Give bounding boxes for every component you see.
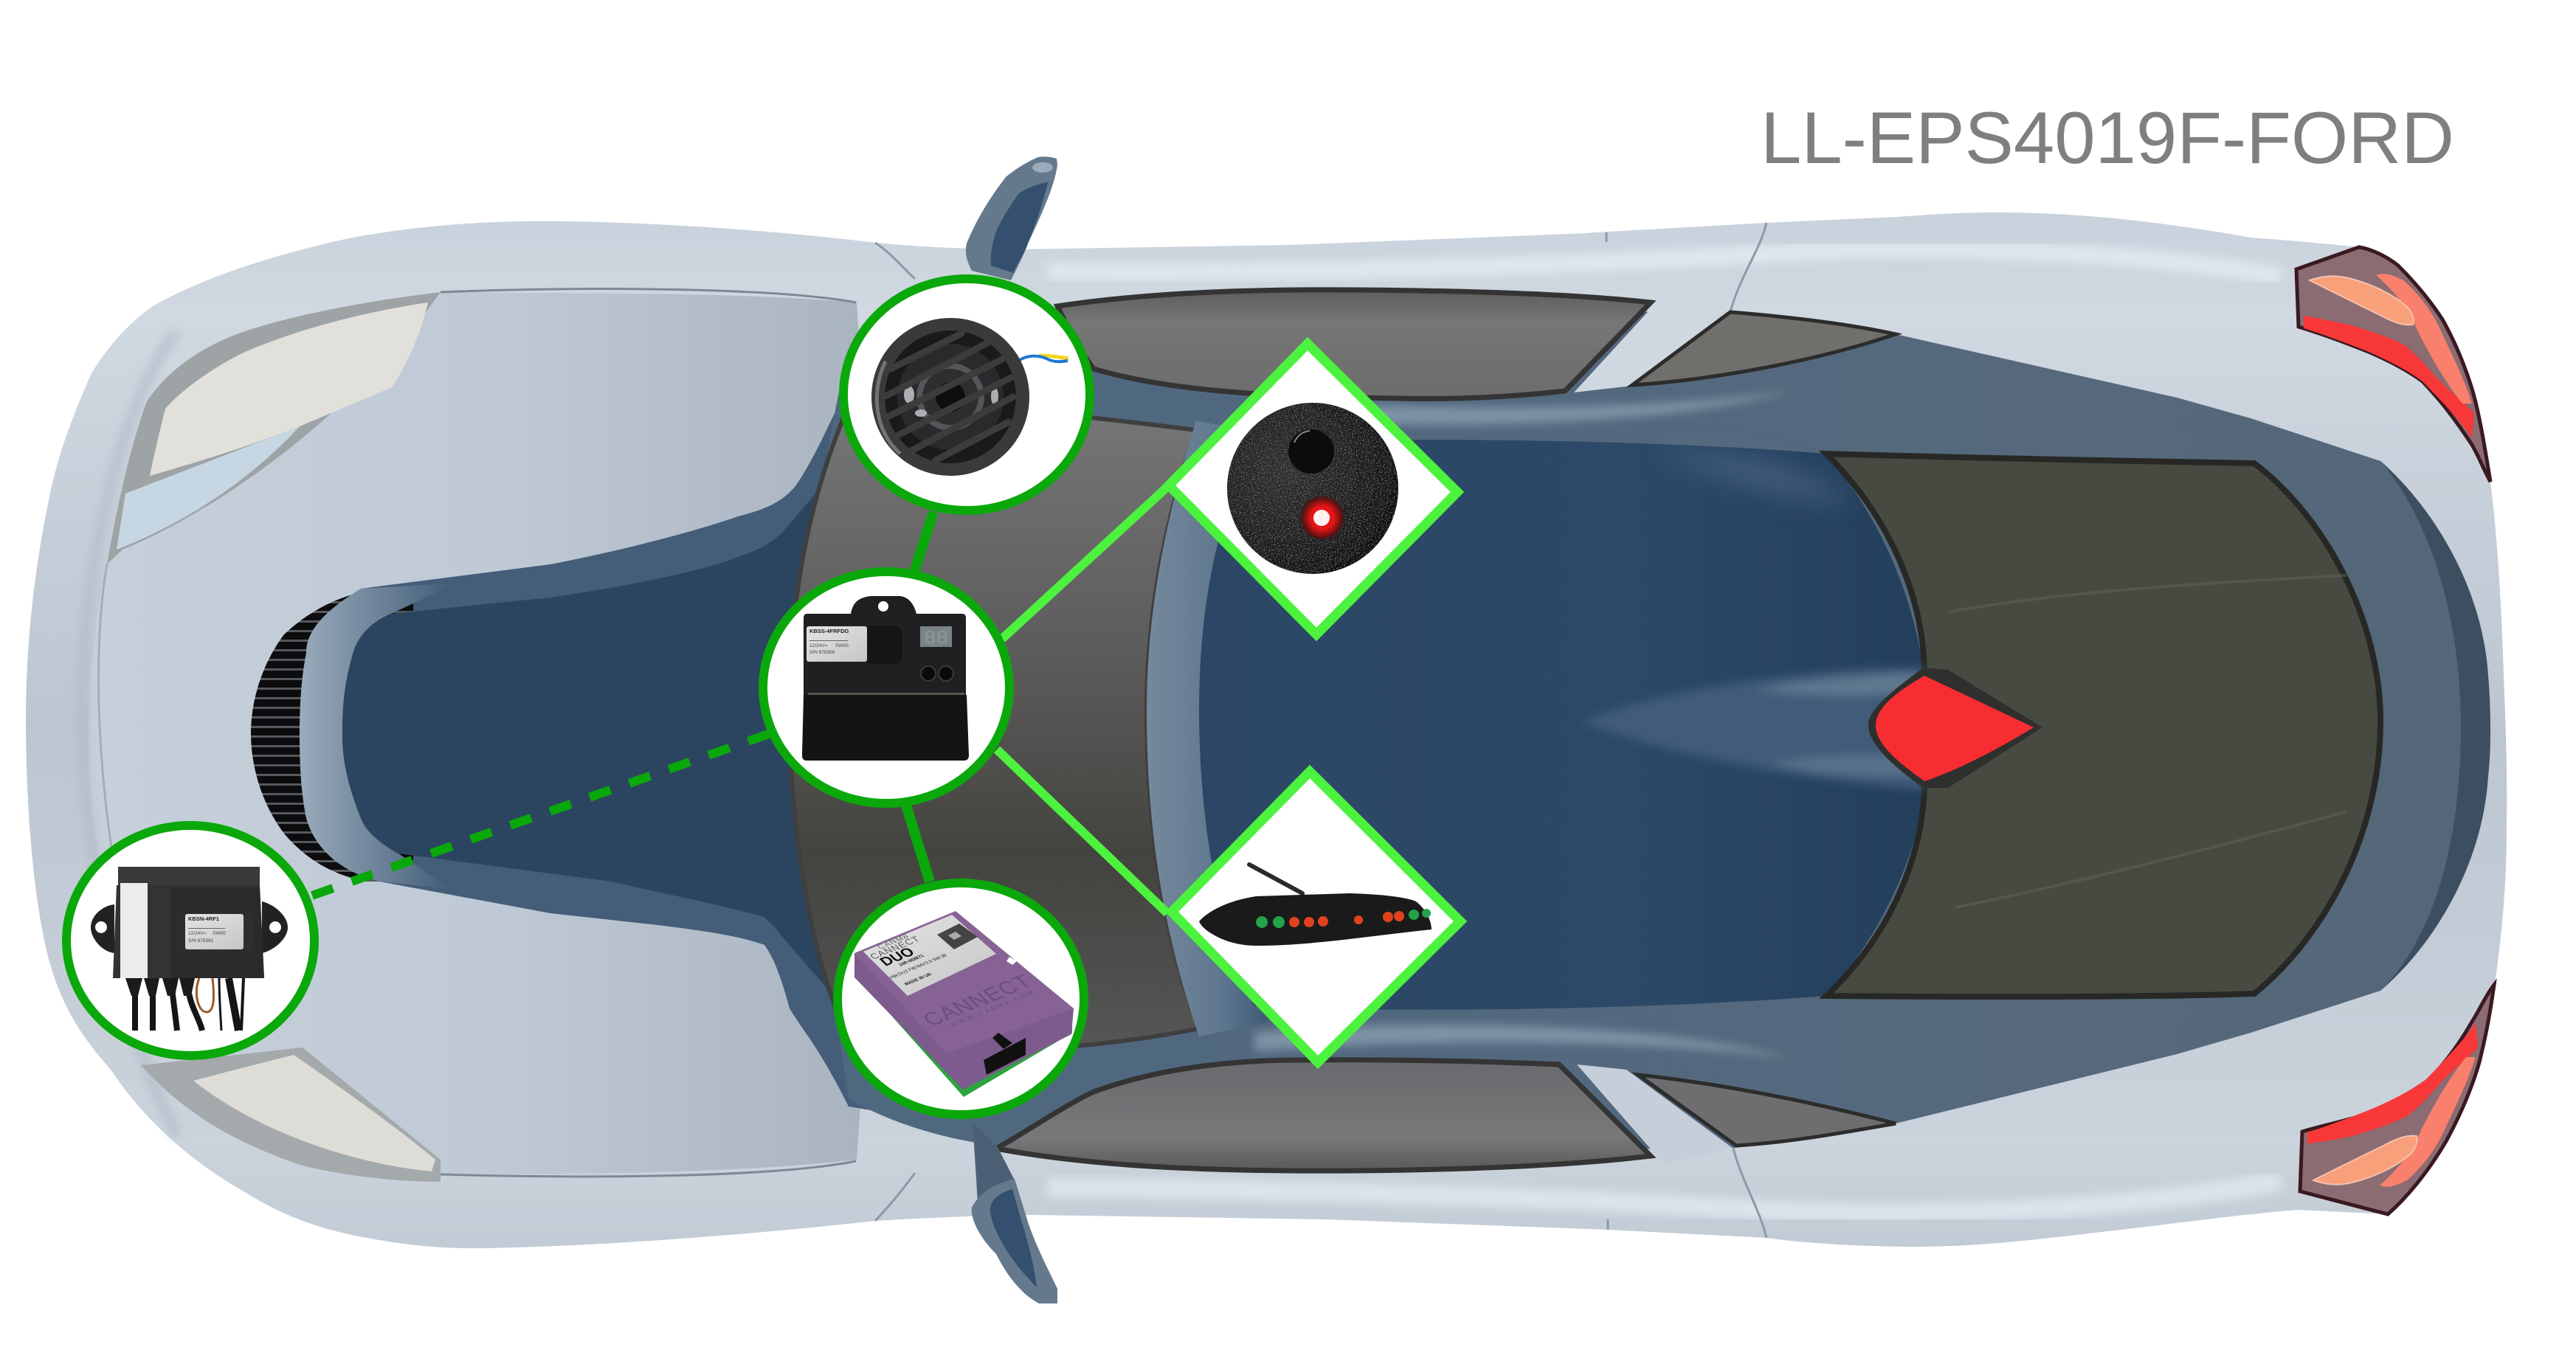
module embossed logo: WWW.CANM8.COM (949, 988, 1037, 1028)
hood panel (89, 292, 885, 1174)
module label text: DUO (877, 945, 918, 969)
panel: canbus module (838, 883, 1084, 1115)
panel: speaker (843, 279, 1090, 510)
module label text: MADE IN UK (903, 972, 933, 986)
icon: speaker wire (1020, 356, 1068, 361)
panel: controller (763, 572, 1009, 803)
connector: controller to display (997, 749, 1167, 913)
controller label (807, 626, 867, 662)
outer rim highlights (1048, 249, 2280, 277)
panel: relay module (66, 825, 314, 1056)
lower tail light (2300, 985, 2494, 1214)
upper rail highlight (1254, 391, 1793, 425)
model number title: LL-EPS4019F-FORD (1761, 97, 2454, 179)
hood blue scoop and cowl (361, 310, 981, 1129)
lower pillar (1577, 1064, 1733, 1163)
upper rear quarter window (1632, 312, 1896, 385)
relay label: SW00 (213, 931, 226, 936)
connector: speaker to controller (914, 512, 933, 572)
panel: button diamond (1169, 344, 1457, 634)
roof highlights (1653, 450, 1852, 502)
relay label (185, 914, 244, 949)
module label text: HW:DU2 FW:NAV3.9 SW:38 (888, 953, 948, 980)
rear window (1826, 454, 2380, 997)
lower rear quarter window (1638, 1075, 1896, 1146)
controller label: KBSS-4FRFDG (809, 628, 849, 634)
relay label: KBSN-4RF1 (188, 915, 219, 922)
a-pillar band (1147, 420, 1269, 1036)
upper mirror (966, 156, 1057, 280)
icon: parking display (1199, 865, 1432, 946)
icon: relay cables (135, 978, 244, 1031)
icon: speaker grille (871, 318, 1029, 476)
icon: relay box (91, 867, 288, 978)
lower rail highlight (1254, 1025, 1793, 1059)
controller label: SW00 (835, 643, 849, 648)
lower side window (996, 1060, 1651, 1171)
icon: canbus module body (854, 911, 1074, 1097)
module embossed logo: CANNECT (918, 971, 1038, 1031)
greenhouse slate (813, 310, 2486, 1151)
hood dark blue centre (342, 472, 834, 996)
lower headlight (141, 1048, 441, 1182)
connector: controller to duo (906, 806, 930, 882)
car body (26, 212, 2507, 1248)
windshield (790, 394, 1199, 1052)
connector: dashed link (312, 732, 775, 896)
door seams (99, 223, 1767, 1238)
connector: controller to button (1002, 487, 1167, 639)
icon: push button sensor (1227, 403, 1398, 574)
module label text: CANNECT (868, 934, 922, 961)
upper side window (1057, 290, 1651, 399)
lower mirror (972, 1121, 1057, 1303)
icon: relay connectors (125, 978, 195, 996)
module label text (868, 932, 948, 986)
relay label: S/N 878361 (188, 938, 214, 943)
icon: controller box: 88 (924, 628, 948, 648)
QR code (937, 924, 978, 949)
module label text: CANM8 (876, 932, 911, 951)
icon: controller box (802, 596, 969, 761)
scoop inner lip (300, 583, 457, 889)
upper tail light (2296, 247, 2490, 482)
relay label: 12/24V= (188, 931, 207, 936)
hood vent (251, 590, 413, 882)
upper pillar (1574, 295, 1730, 392)
controller label: 12/24V= (809, 643, 828, 648)
roof fin (1581, 668, 2043, 789)
upper headlight (107, 292, 441, 564)
roof (1199, 440, 1924, 1010)
panel: display diamond (1172, 772, 1460, 1062)
module label text: 10R-068871 (897, 954, 926, 967)
rear window streaks (1948, 575, 2347, 907)
rear slate dark edge (2380, 461, 2490, 991)
controller label: S/N 878359 (809, 650, 835, 655)
